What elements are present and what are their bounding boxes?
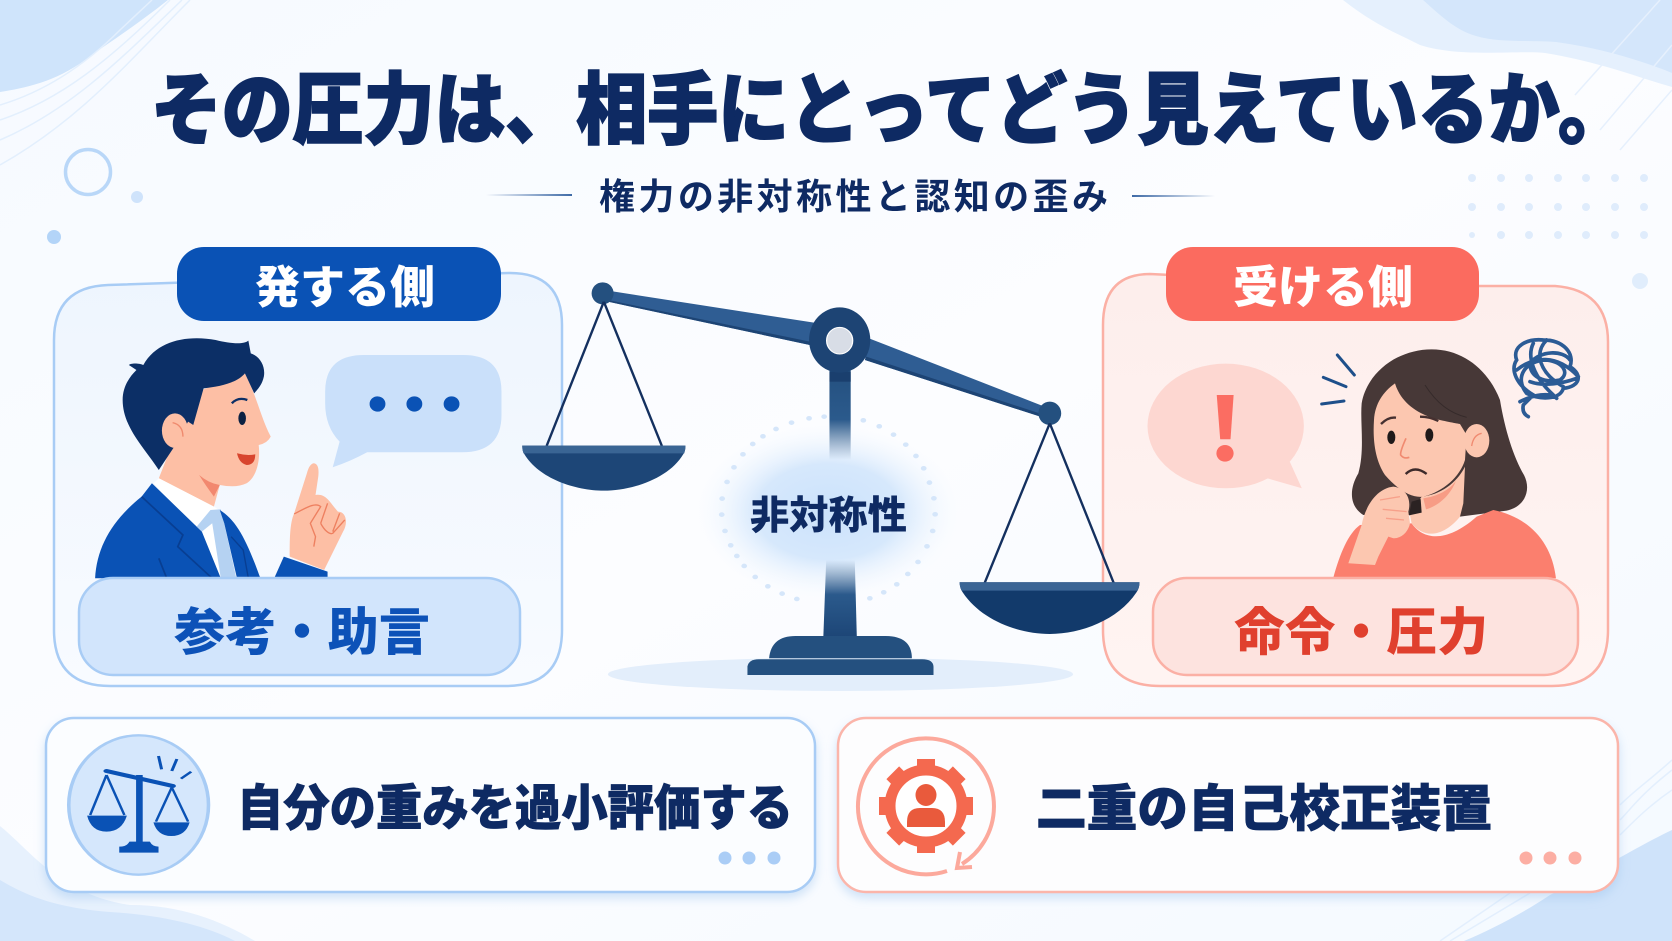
panel: speaker side (54, 247, 562, 686)
decor: circles and dot grid (47, 150, 1648, 289)
balance scale tilted toward receiver (522, 282, 1140, 691)
card text: 自分の重みを過小評価する (237, 782, 793, 836)
illustration: worried woman (1322, 340, 1578, 578)
subtitle: 権力の非対称性と認知の歪み (599, 176, 1108, 217)
illustration: man pointing with speech bubble (95, 338, 501, 578)
label: 参考・助言: 参考・助言 (174, 604, 430, 661)
icon: gear with person and cycle arrow (858, 738, 994, 874)
badge: 受ける側: 受ける側 (1233, 262, 1413, 313)
badge: 発する側 (177, 247, 501, 321)
badge: 受ける側 (1166, 247, 1479, 321)
center label: 非対称性: 非対称性 (750, 495, 907, 538)
card text: 二重の自己校正装置 (1036, 781, 1492, 837)
decorative dots (718, 852, 780, 864)
label: 命令・圧力: 命令・圧力 (1234, 604, 1488, 661)
illustration: exclamation speech bubble (1148, 364, 1304, 488)
card: underestimating own weight (46, 718, 815, 892)
label: 命令・圧力 (1153, 578, 1578, 675)
label: 参考・助言 (79, 578, 520, 675)
card: double self-calibration device (838, 718, 1618, 892)
badge: 発する側: 発する側 (255, 262, 435, 313)
decorative dots (1520, 852, 1582, 864)
icon: small tilted scale (69, 735, 208, 875)
panel: receiver side (1103, 247, 1608, 686)
